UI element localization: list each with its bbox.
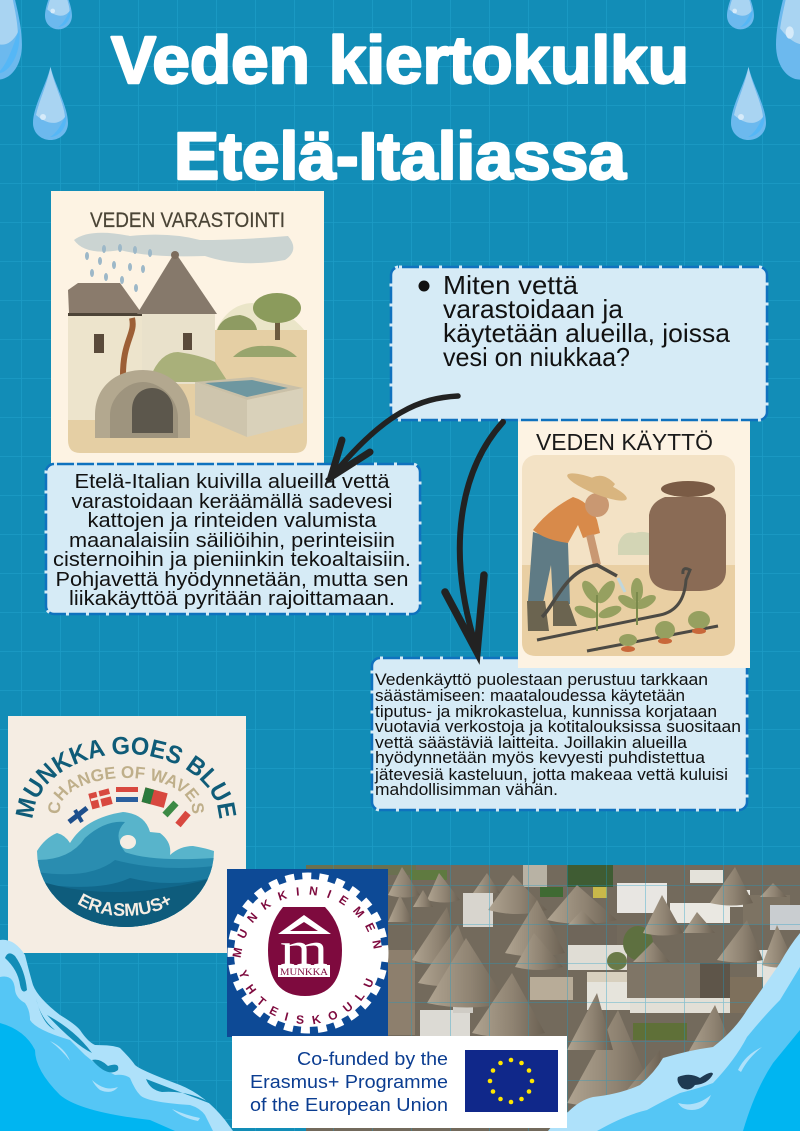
panel: water use illustration [518, 418, 750, 668]
text box: water use: hyödynnetään myös kevyesti puhdistettua [375, 749, 706, 767]
flags [69, 787, 188, 825]
school emblem: MUNKKA [280, 968, 328, 978]
illustration heading: VEDEN KÄYTTÖ [536, 429, 713, 455]
text box: question [391, 267, 767, 420]
school emblem: m [280, 923, 328, 976]
logo: Munkka Goes Blue: ERASMUS+ [78, 893, 170, 916]
shield [268, 907, 342, 996]
logo: Munkkiniemen yhteiskoulu: MUNKKINIEMEN [232, 886, 382, 958]
photo: trulli of Alberobello [306, 865, 800, 1131]
gear text [241, 895, 375, 962]
grid overlay [306, 865, 800, 1131]
arrow: question to use [445, 422, 503, 652]
dark blob [678, 1073, 713, 1089]
text box: water use: vettä säästäviä laitteita. Joillakin alueilla [375, 734, 688, 752]
co-funding text: Erasmus+ Programme [250, 1071, 448, 1092]
text box: water use: mahdollisimman vähän. [375, 781, 558, 799]
text box: water use: tiputus- ja mikrokastelua, kunnissa korjataan [375, 703, 717, 721]
text box: water use: jätevesiä kasteluun, jotta makeaa vettä kuluisi [374, 766, 728, 784]
conical roofs [388, 867, 795, 1110]
co-funding text: Co-funded by the [297, 1048, 448, 1069]
text box: water storage: Pohjavettä hyödynnetään, mutta sen [56, 568, 408, 591]
water drops decoration [0, 0, 800, 140]
text box: question: vesi on niukkaa? [443, 342, 630, 372]
title: Veden kiertokulku [111, 23, 689, 98]
co-funding text: of the European Union [250, 1094, 448, 1115]
panel: water storage illustration [51, 191, 324, 466]
wave highlights [738, 1047, 762, 1072]
water wave: bottom left [0, 940, 233, 1131]
title [111, 23, 689, 194]
logo: Munkka Goes Blue: CHANGE OF WAVES [48, 766, 204, 814]
logo: Munkka Goes Blue [8, 716, 246, 953]
text box: water use: säästämiseen: maataloudessa käytetään [375, 687, 685, 705]
title: Etelä-Italiassa [174, 119, 627, 194]
wave curl [120, 835, 136, 849]
text box: water storage: Etelä-Italian kuivilla alueilla vettä [74, 470, 390, 493]
text box: water storage [46, 464, 420, 614]
text box: water use: Vedenkäyttö puolestaan perustuu tarkkaan [375, 671, 708, 689]
text box: water storage: varastoidaan keräämällä sadevesi [72, 490, 392, 513]
text box: water storage: kattojen ja rinteiden valumista [88, 509, 377, 532]
logo: Munkka Goes Blue: MUNKKA GOES BLUE [16, 736, 236, 818]
farmer scene [522, 455, 735, 656]
rain [85, 244, 152, 292]
school emblem [278, 915, 331, 978]
arc heading [33, 754, 219, 820]
text box: water use [372, 658, 747, 810]
EU flag [465, 1050, 558, 1112]
text box: question: varastoidaan ja [443, 294, 624, 324]
text box: water storage: cisternoihin ja pieniinkin tekoaltaisiin. [53, 548, 411, 571]
water wave: bottom right [548, 933, 800, 1131]
wave highlights [5, 953, 214, 1105]
co-funding panel [232, 1036, 567, 1128]
storage scene [68, 233, 307, 453]
wave emblem [37, 812, 214, 930]
logo: Munkkiniemen yhteiskoulu: YHTEISKOULU [240, 969, 373, 1024]
text box: question: käytetään alueilla, joissa [443, 318, 731, 348]
logo: Munkkiniemen yhteiskoulu [227, 869, 388, 1037]
buildings and vegetation [306, 865, 800, 1040]
arrow: question to storage [331, 396, 458, 477]
text box: question: Miten vettä [443, 270, 579, 300]
illustration heading: VEDEN VARASTOINTI [90, 209, 285, 232]
text box: water use: vuotavia verkostoja ja kotitalouksissa suositaan [375, 718, 741, 736]
co-funding text [250, 1048, 448, 1115]
text box: water storage: liikakäyttöä pyritään rajoittamaan. [69, 587, 395, 610]
text box: water storage: maanalaisiin säiliöihin, perinteisiin [69, 529, 395, 552]
